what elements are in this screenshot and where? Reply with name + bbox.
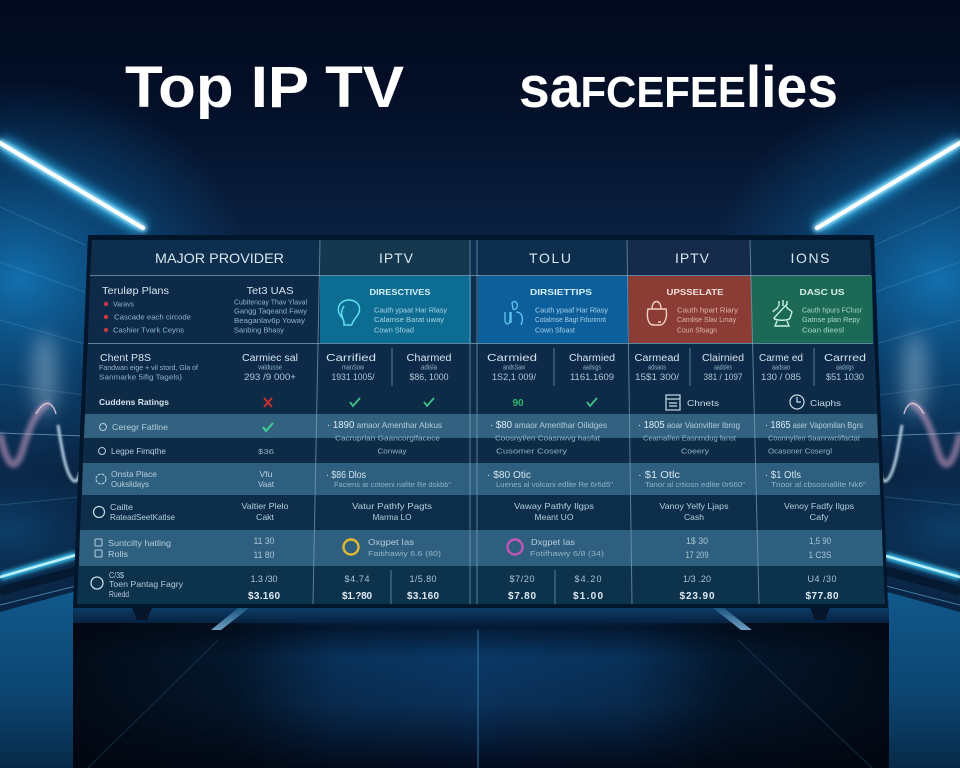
neon bar: upper right bbox=[817, 143, 960, 228]
row: cable: Venoy Fadfy Ilgps bbox=[784, 501, 854, 511]
row: pricing: aadsigs bbox=[583, 362, 601, 372]
row: cable: Vanoy Yelfy Ljaps bbox=[660, 501, 728, 511]
icon: league marker bbox=[98, 448, 106, 454]
row: family rating: 1,5 90 bbox=[809, 536, 831, 546]
row: customer ratings: Cuddens Ratings bbox=[99, 397, 169, 407]
row: cable: Cash bbox=[684, 512, 704, 522]
row: final pricing: $3.160 bbox=[407, 591, 439, 602]
icon: clock bbox=[790, 395, 804, 409]
row: plans, first column: Beaganlav6p Yoway bbox=[234, 316, 305, 325]
row: final pricing: $7.80 bbox=[508, 591, 536, 602]
neon bar: upper left bbox=[0, 143, 143, 228]
row: final pricing: Toen Pantag Fagry bbox=[109, 579, 184, 589]
header row: IONS bbox=[790, 250, 830, 266]
row: family rating: Fotifhawiy 6/8 (34) bbox=[530, 549, 605, 558]
cell: red provider: Cauth hpart Riary bbox=[677, 306, 738, 314]
row: family rating bbox=[95, 536, 832, 560]
row: cable: Meant UO bbox=[534, 512, 574, 522]
row: feature bullets: Ceregr Fatline bbox=[112, 422, 168, 432]
row: online places: Oukslidays bbox=[111, 479, 149, 489]
row: family rating: Faitihawiy 6.6 (80) bbox=[368, 549, 442, 558]
row: pricing: Chent P8S bbox=[100, 353, 151, 364]
neon bar: lower right bbox=[886, 556, 960, 605]
icons: green checks bbox=[350, 398, 597, 406]
row: family rating: 17 209 bbox=[686, 550, 708, 560]
row: pricing: aadsles bbox=[714, 362, 732, 372]
tv comparison panel bbox=[73, 235, 888, 608]
row: cable: Vatur Pathfy Pagts bbox=[352, 501, 432, 511]
row: final pricing: $4.20 bbox=[574, 574, 602, 584]
row: plans, first column bbox=[102, 286, 307, 334]
row: online places: Luenes al volcani edlite Re 6r6d5" bbox=[496, 480, 613, 489]
row: feature bullets: · 1865 aser Vapomilan Bgrs bbox=[765, 420, 863, 431]
icon: online marker bbox=[96, 474, 106, 484]
icon: green check bbox=[263, 423, 273, 431]
cell: blue provider: Cauth ypaaf Har Rlasy bbox=[535, 306, 608, 314]
row: online places: Vaat bbox=[258, 479, 275, 489]
row: pricing: Carmied bbox=[487, 353, 537, 364]
row: league price: $36 bbox=[258, 447, 274, 456]
row: pricing: 15$1 300/ bbox=[635, 372, 680, 382]
cell: teal provider: Cauth ypaat Har Rlasy bbox=[374, 306, 447, 314]
row: final pricing: 1/3 .20 bbox=[683, 574, 711, 584]
row: feature bullets: Coosnyl/en Coasnwvg hasfat bbox=[495, 434, 601, 442]
row: pricing: Fandwan eige + vil stord, Gla of bbox=[99, 363, 199, 372]
row: pricing: adisla bbox=[421, 362, 438, 372]
row: feature bullets: · 1890 amaor Amenthar Abkus bbox=[327, 420, 442, 431]
cell: teal provider bbox=[338, 287, 447, 334]
icon: yellow ring bbox=[344, 540, 358, 554]
row: online places: Vfu bbox=[260, 469, 273, 479]
row: family rating: Dxgpet Ias bbox=[531, 537, 575, 547]
row: plans, first column: Varavs bbox=[113, 300, 134, 308]
row: plans, first column: Gangg Taqeand Fawy bbox=[234, 306, 307, 316]
row: plans, first column: Cubitencay Thav Ylaval bbox=[234, 298, 307, 306]
row: final pricing: Ruedd bbox=[109, 589, 129, 599]
row: online places: · $1 Otls bbox=[765, 470, 801, 481]
row: feature bullets: Cacruprlan Gaancorglfacece bbox=[335, 434, 440, 442]
cell: blue provider: Cotalmse Bagt Fdurimnt bbox=[535, 315, 607, 324]
row: pricing: adsaos bbox=[648, 362, 666, 372]
row: final pricing: $23.90 bbox=[680, 591, 715, 602]
cell: red provider: Carnlise Slav Lmay bbox=[677, 315, 736, 324]
row: pricing: 1931 1005/ bbox=[332, 372, 375, 382]
row: plans, first column: Cashier Tvark Ceyns bbox=[113, 326, 184, 334]
row: pricing: Charmed bbox=[406, 353, 452, 364]
row: final pricing: $77.80 bbox=[806, 591, 839, 602]
row: cable: Cailte bbox=[110, 502, 133, 512]
row: final pricing bbox=[91, 570, 839, 602]
row: pricing: $86, 1000 bbox=[410, 372, 448, 382]
row: pricing: Carmead bbox=[634, 353, 680, 364]
title: right: saFCEFEElies bbox=[519, 55, 838, 120]
icon: red cross bbox=[264, 398, 272, 407]
cell: teal provider: DIRESCTIVES bbox=[370, 287, 431, 297]
title: left: Top IP TV bbox=[125, 55, 404, 120]
row: feature bullets: Ocasoner Cosergl bbox=[768, 446, 832, 456]
row: cable bbox=[94, 501, 854, 522]
cell: blue provider: DIRSIETTIPS bbox=[530, 287, 592, 297]
cell: green provider: Gatnse plan Repy bbox=[802, 315, 860, 324]
row: feature bullets: · $80 amaor Amenthar Oilidges bbox=[490, 420, 607, 431]
icon: feature marker bbox=[100, 424, 106, 430]
cell: red provider: UPSSELATE bbox=[666, 287, 724, 297]
row: pricing: aadslgs bbox=[836, 362, 854, 372]
row: final pricing: 1.3 /30 bbox=[250, 574, 278, 584]
row: final pricing: 1/5.80 bbox=[410, 574, 436, 584]
cell: green provider: DASC US bbox=[800, 287, 845, 297]
cell: red provider: Coun Sfoagn bbox=[677, 326, 717, 334]
row: customer ratings bbox=[99, 395, 841, 410]
row: plans, first column: Teruløp Plans bbox=[102, 286, 169, 297]
grid lines bbox=[88, 240, 873, 604]
row: family rating: 1$ 30 bbox=[686, 536, 708, 546]
row: pricing: Carrred bbox=[824, 353, 866, 364]
cell: green provider bbox=[773, 287, 862, 334]
row: pricing: Clairnied bbox=[702, 353, 744, 364]
icon: light bulb bbox=[338, 300, 360, 325]
coloured provider cells bbox=[320, 276, 873, 343]
screen base bbox=[77, 240, 885, 604]
cell: blue provider bbox=[505, 287, 608, 334]
cell: teal provider: Calamse Barat uway bbox=[374, 315, 444, 324]
row: online places: · $80 Otic bbox=[487, 470, 531, 481]
row: final pricing: $3.160 bbox=[248, 591, 280, 602]
row: online places: Tnoor al cbsosnallite Nk6" bbox=[771, 480, 866, 489]
row: cable: Cakt bbox=[256, 512, 275, 522]
row: customer ratings: Chnets bbox=[687, 398, 719, 408]
row: league price bbox=[98, 446, 274, 456]
header row: IPTV bbox=[379, 250, 414, 266]
row: customer ratings: 90 bbox=[512, 398, 524, 409]
row shading bbox=[77, 240, 885, 604]
row: feature bullets: Cusomer Cosery bbox=[496, 446, 567, 456]
icon: price marker bbox=[91, 577, 103, 589]
icon: calendar bbox=[666, 395, 680, 410]
row: family rating: 11 30 bbox=[254, 536, 274, 546]
icon: person bbox=[505, 301, 522, 325]
row: pricing: Sanmarke 5ifig Tagels) bbox=[99, 372, 183, 382]
row: feature bullets: Ceamaf/en Easnmdug fanst bbox=[643, 434, 737, 442]
cell: green provider: Cauth hpurs FClusr bbox=[802, 306, 862, 314]
row: customer ratings: Ciaphs bbox=[810, 398, 841, 408]
row: pricing: Carme ed bbox=[759, 353, 803, 364]
header row: TOLU bbox=[529, 250, 571, 266]
row: plans, first column: Sanbing Bhasy bbox=[234, 326, 284, 334]
row: pricing: aadsao bbox=[772, 362, 790, 372]
row: pricing: valdusse bbox=[258, 362, 282, 372]
row: pricing: 1S2,1 009/ bbox=[492, 372, 536, 382]
row: pricing: Carmiec sal bbox=[242, 353, 298, 364]
row: feature bullets: Conway bbox=[378, 446, 407, 456]
header row bbox=[155, 250, 830, 266]
row: cable: Valtier Plelo bbox=[242, 501, 289, 511]
header row: IPTV bbox=[675, 250, 710, 266]
icon: family marker bbox=[95, 539, 102, 557]
row: feature bullets bbox=[100, 420, 863, 456]
row: online places: · $86 Dlos bbox=[326, 470, 366, 481]
icon: red check bullets bbox=[104, 302, 108, 332]
row: family rating: 11 80 bbox=[254, 550, 274, 560]
row: family rating: Rolls bbox=[108, 549, 128, 559]
icon: cable marker bbox=[94, 506, 104, 518]
row: online places: Tanor al crtiosn edlite 0r660" bbox=[645, 480, 745, 489]
row: online places: · $1 Otlc bbox=[638, 470, 680, 481]
row: pricing: 381 / 1097 bbox=[704, 372, 742, 382]
row: cable: Vaway Pathfy Ilgps bbox=[514, 501, 594, 511]
row: final pricing: $7/20 bbox=[510, 574, 534, 584]
row: final pricing: U4 /30 bbox=[808, 574, 836, 584]
row: family rating: Suntcilty hatling bbox=[108, 538, 171, 548]
row: pricing: 293 /9 000+ bbox=[244, 372, 296, 382]
row: family rating: Oxgpet Ias bbox=[368, 537, 414, 547]
row: pricing: 130 / 085 bbox=[761, 372, 801, 382]
row: pricing: 1161.1609 bbox=[570, 372, 614, 382]
sound wave: right bbox=[875, 333, 960, 481]
tv stand bbox=[132, 608, 830, 630]
cell: red provider bbox=[647, 287, 738, 334]
icon: pink ring bbox=[508, 540, 522, 554]
row: online places: Onsta Place bbox=[111, 469, 157, 479]
row: final pricing: $1.00 bbox=[573, 591, 603, 602]
title bbox=[125, 55, 838, 120]
row: final pricing: $1.?80 bbox=[342, 591, 372, 602]
row: plans, first column: Cascade each circode bbox=[114, 312, 191, 322]
floor with reflection bbox=[0, 590, 960, 768]
row: league price: Legpe Fimqthe bbox=[111, 446, 166, 456]
cell: teal provider: Cown Sfoad bbox=[374, 326, 414, 334]
sound wave: left bbox=[0, 333, 85, 481]
row: online places: Faciens ar cotoeni nafite Re dskbb" bbox=[334, 480, 451, 489]
row: feature bullets: Coonnyl/en Saannwcl/factat bbox=[768, 434, 861, 442]
row: final pricing: $4.74 bbox=[344, 574, 370, 584]
tv bezel bbox=[73, 235, 888, 608]
row: pricing: manSow bbox=[342, 362, 364, 372]
row: cable: Marma LO bbox=[372, 512, 412, 522]
row: pricing: Charmied bbox=[569, 353, 615, 364]
row: final pricing: C/3$ bbox=[109, 570, 124, 580]
row: cable: Cafy bbox=[810, 512, 829, 522]
row: feature bullets: Coeery bbox=[681, 446, 709, 456]
row: online places bbox=[96, 469, 866, 489]
row: family rating: 1 C3S bbox=[808, 550, 832, 560]
row: pricing: $51 1030 bbox=[826, 372, 864, 382]
icon: hand bbox=[773, 300, 792, 326]
row: plans, first column: Tet3 UAS bbox=[246, 286, 294, 297]
neon bar: lower left bbox=[0, 555, 76, 605]
row: pricing: Carrified bbox=[326, 353, 376, 364]
header row: MAJOR PROVIDER bbox=[155, 250, 284, 266]
row: cable: RateadSeetKatlse bbox=[110, 512, 175, 522]
row: pricing: andsSaw bbox=[503, 362, 525, 372]
row: pricing bbox=[99, 353, 866, 382]
row: feature bullets: · 1805 aoar Vaonvilter Ibrog bbox=[638, 420, 740, 431]
cell: green provider: Coan dieesl bbox=[802, 326, 844, 334]
cell: blue provider: Cown Sfoast bbox=[535, 326, 576, 334]
icon: basket bbox=[647, 302, 667, 325]
